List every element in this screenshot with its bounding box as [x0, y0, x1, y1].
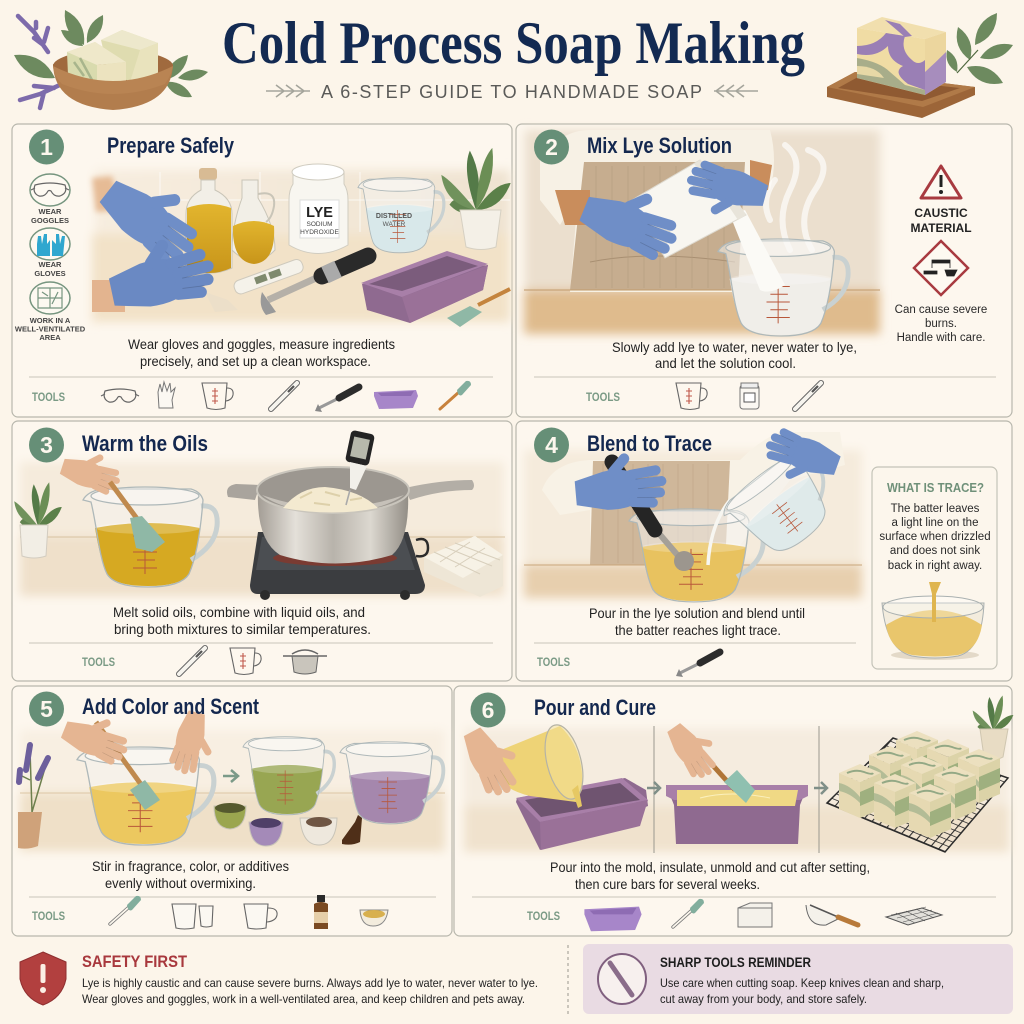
step 4 tools row — [537, 652, 720, 677]
left gloved hand — [576, 179, 681, 262]
pouring hand — [459, 721, 524, 798]
additive bowl — [300, 817, 337, 845]
step 3 description: bring both mixtures to similar temperatures. — [114, 621, 371, 637]
step dividers — [654, 726, 819, 853]
green colorant bowl — [214, 803, 246, 829]
purple colorant bowl — [249, 818, 283, 846]
soap mold — [361, 251, 488, 323]
plant in white pot — [441, 148, 511, 250]
subtitle: A 6-STEP GUIDE TO HANDMADE SOAP — [321, 82, 702, 102]
safety icon: gloves: WEAR — [39, 260, 62, 269]
pouring lye cup — [718, 443, 848, 569]
spatula — [447, 289, 510, 327]
callout: what is trace: a light line on the — [892, 517, 978, 529]
lye stream — [708, 500, 730, 565]
sharp tools reminder notice: Use care when cutting soap. Keep knives clean and sharp, — [660, 976, 944, 990]
filled mold — [666, 785, 808, 844]
step 5 tools row: TOOLS — [32, 911, 65, 923]
step 6 badge: 6 — [482, 697, 494, 723]
corrosive diamond — [914, 241, 968, 295]
step 5 badge — [29, 692, 64, 726]
panel: step 5 add color and scent — [12, 686, 452, 936]
lye stream — [730, 210, 785, 292]
induction hotplate — [250, 532, 428, 600]
panel: step 2 mix lye solution — [516, 124, 1012, 417]
wire cooling rack — [827, 738, 1008, 852]
sharp tools reminder notice: cut away from your body, and store safely. — [660, 992, 867, 1006]
lavender pot — [18, 745, 48, 849]
panel: step 3 warm the oils — [12, 421, 512, 681]
callout: what is trace: WHAT IS TRACE? — [887, 481, 984, 495]
left gloved hand — [573, 456, 664, 513]
potted plant — [14, 482, 62, 558]
icon: red shield — [20, 952, 66, 1005]
steam — [766, 145, 824, 250]
measuring cup of distilled water: WATER — [383, 221, 406, 228]
step 2 description — [612, 339, 857, 371]
step 1 tools row: TOOLS — [32, 392, 65, 404]
step 2 tools row — [586, 383, 821, 410]
warning triangle — [921, 166, 961, 198]
scene: pouring lye into water — [524, 130, 880, 336]
step 1 description: Wear gloves and goggles, measure ingredients — [128, 336, 395, 352]
lye jar: HYDROXIDE — [300, 229, 339, 236]
step 3 badge: 3 — [40, 432, 53, 458]
caution note — [895, 304, 987, 344]
scene: stirring in color and scent — [18, 709, 445, 851]
lye jar: LYE — [306, 205, 333, 221]
scene: workspace with gloved hands and ingredients — [92, 148, 511, 327]
right gloved hand — [686, 160, 772, 221]
step 4 badge — [534, 428, 569, 462]
safety icon: goggles: WEAR — [39, 207, 62, 216]
panel: step 6 pour and cure — [454, 686, 1013, 936]
scene: pouring, molding and curing — [459, 696, 1013, 853]
safety icon: ventilated area: WORK IN A — [30, 316, 71, 325]
caustic label: MATERIAL — [910, 221, 972, 235]
green soap cup — [243, 737, 334, 815]
illustration: soap bowl with lavender — [14, 10, 208, 110]
step 2 description: and let the solution cool. — [655, 355, 796, 371]
step 1 badge: 1 — [40, 134, 53, 160]
scene: blending batter to trace — [524, 427, 862, 602]
measuring cup of distilled water — [358, 178, 444, 253]
step 4 badge: 4 — [545, 432, 558, 458]
digital probe thermometer — [345, 430, 375, 505]
hand stirring with spatula — [58, 447, 165, 552]
arrow — [223, 770, 238, 782]
lye jar — [289, 164, 348, 254]
step 5 badge: 5 — [40, 696, 53, 722]
spatula with hand — [663, 716, 755, 803]
step 2 description: Slowly add lye to water, never water to lye, — [612, 339, 857, 355]
empty purple mold — [516, 778, 648, 850]
illustration: marbled soap on tray — [827, 13, 1013, 118]
step 2 heading: Mix Lye Solution — [587, 133, 732, 158]
safety first notice — [20, 952, 538, 1006]
step 6 badge — [470, 692, 506, 728]
lower gloved hand — [92, 237, 214, 314]
trace bowl — [882, 582, 984, 660]
safety icon: gloves — [30, 228, 70, 278]
step 6 description: then cure bars for several weeks. — [575, 876, 760, 892]
step 4 heading: Blend to Trace — [587, 431, 712, 456]
step 4 tools row: TOOLS — [537, 657, 570, 669]
safety icon: ventilated area: AREA — [39, 333, 61, 342]
panel: step 1 prepare safely — [12, 124, 512, 417]
callout: what is trace: The batter leaves — [891, 503, 980, 515]
upper gloved hand — [92, 164, 206, 268]
pouring cup of batter — [496, 721, 590, 808]
caustic label: CAUSTIC — [914, 206, 968, 220]
panel: step 4 blend to trace — [516, 421, 1012, 681]
step 2 badge — [534, 130, 569, 164]
cloth scrap — [205, 292, 238, 312]
step 5 description — [92, 858, 289, 891]
digital thermometer — [232, 258, 305, 296]
potted plant — [973, 696, 1013, 760]
step 1 description: precisely, and set up a clean workspace. — [140, 353, 371, 369]
safety first notice: SAFETY FIRST — [82, 952, 188, 971]
sharp tools reminder notice — [583, 944, 1013, 1014]
callout: what is trace — [872, 467, 997, 669]
measuring cup with lye water — [718, 239, 848, 336]
oil bottle — [186, 168, 232, 273]
step 3 heading: Warm the Oils — [82, 431, 208, 456]
caution note: Can cause severe — [895, 304, 987, 316]
step 6 tools row: TOOLS — [527, 911, 560, 923]
cup of yellow batter — [77, 747, 214, 845]
step 1 tools row — [32, 381, 471, 412]
step 1 description — [128, 336, 395, 369]
step 2 badge: 2 — [545, 134, 558, 160]
shirt and apron — [542, 432, 845, 565]
step 4 description — [589, 605, 805, 638]
step 2 tools row: TOOLS — [586, 392, 620, 404]
step 3 badge — [29, 428, 64, 462]
tipped amber bottle — [342, 815, 362, 845]
safety icon: gloves: GLOVES — [34, 269, 66, 278]
immersion blender in batter — [612, 462, 694, 571]
safety icon: goggles: GOGGLES — [31, 216, 69, 225]
step 6 heading: Pour and Cure — [534, 695, 656, 720]
step 3 tools row — [82, 648, 327, 674]
safety icon: goggles — [30, 174, 70, 225]
caustic label — [910, 206, 972, 235]
oil carafe — [232, 180, 275, 264]
arrows between steps — [647, 782, 827, 794]
step 5 tools row — [32, 895, 388, 929]
step 6 description: Pour into the mold, insulate, unmold and cut after setting, — [550, 859, 870, 875]
step 3 description: Melt solid oils, combine with liquid oils, and — [113, 604, 365, 620]
step 6 description — [550, 859, 870, 892]
folded towel — [424, 536, 503, 597]
immersion blender — [261, 256, 368, 315]
steel pot — [227, 467, 474, 564]
step 6 tools row — [527, 899, 942, 931]
title: Cold Process Soap Making — [222, 10, 805, 76]
hands stirring — [59, 709, 217, 810]
lye jar: SODIUM — [306, 221, 332, 228]
right gloved hand — [763, 427, 843, 489]
step 5 description: evenly without overmixing. — [105, 875, 256, 891]
callout: what is trace: surface when drizzled — [879, 531, 991, 543]
measuring cup of oil — [83, 487, 217, 587]
step 5 description: Stir in fragrance, color, or additives — [92, 858, 289, 874]
measuring cup of distilled water: DISTILLED — [376, 213, 412, 220]
callout: what is trace: back in right away. — [888, 560, 982, 572]
scene: warming oils on hotplate — [14, 430, 505, 600]
step 1 heading: Prepare Safely — [107, 133, 235, 158]
safety first notice: Lye is highly caustic and can cause severe burns. Always add lye to water, never water to lye. — [82, 976, 538, 990]
step 4 description: Pour in the lye solution and blend until — [589, 605, 805, 621]
purple soap cup — [340, 742, 443, 824]
safety icon: ventilated area — [15, 282, 86, 342]
step 4 description: the batter reaches light trace. — [615, 622, 781, 638]
step 5 heading: Add Color and Scent — [82, 694, 260, 719]
batter cup — [629, 509, 763, 602]
shirt and apron — [540, 130, 774, 292]
icon: knife in circle — [598, 954, 646, 1004]
step 3 tools row: TOOLS — [82, 657, 115, 669]
sharp tools reminder notice: SHARP TOOLS REMINDER — [660, 955, 811, 970]
safety icon: ventilated area: WELL-VENTILATED — [15, 324, 86, 334]
safety first notice: Wear gloves and goggles, work in a well-ventilated area, and keep children and pets away. — [82, 992, 525, 1006]
lye container — [632, 160, 746, 258]
nine cut soap bars — [839, 731, 1000, 838]
caution note: burns. — [925, 318, 957, 330]
step 1 badge — [29, 130, 64, 164]
caution note: Handle with care. — [897, 332, 985, 344]
step 3 description — [113, 604, 371, 637]
callout: what is trace: and does not sink — [890, 545, 980, 557]
